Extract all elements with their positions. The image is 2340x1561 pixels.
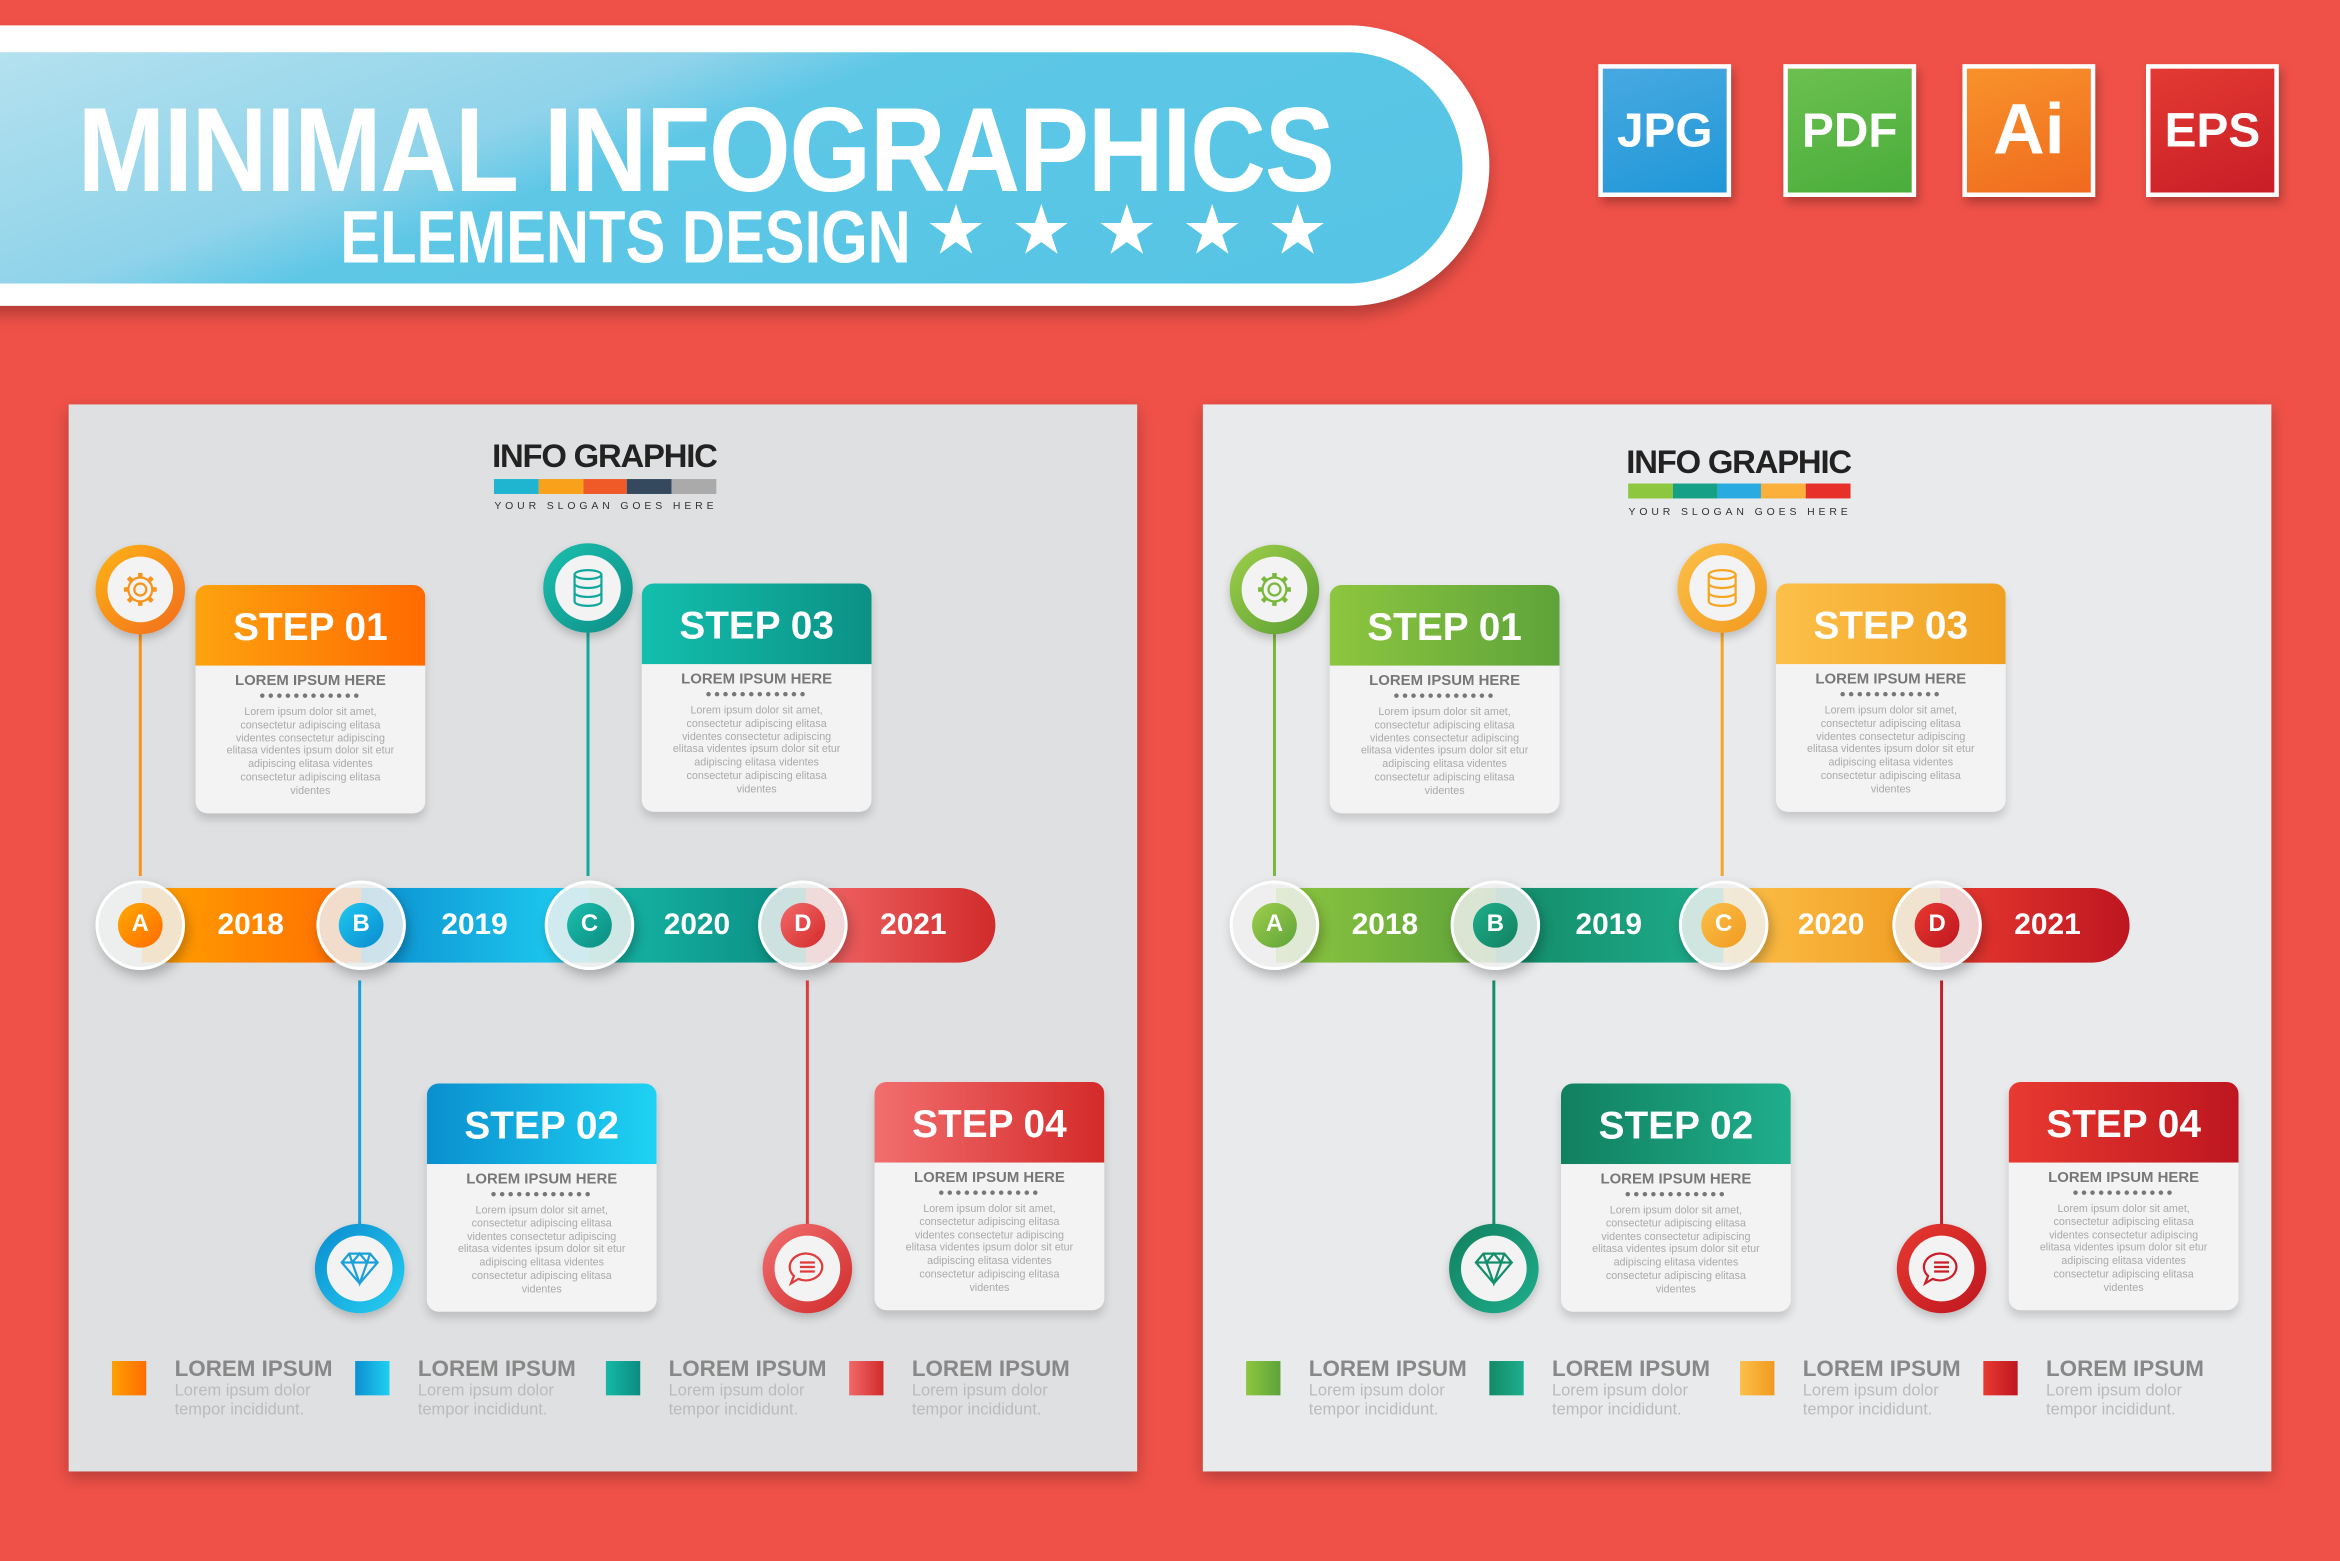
legend xyxy=(1246,1357,2204,1419)
legend: Lorem ipsum dolor xyxy=(175,1382,311,1400)
card: step 03: ●●●●●●●●●●●● xyxy=(1840,689,1942,700)
card: step 03: LOREM IPSUM HERE xyxy=(681,672,832,688)
card: step 02: Lorem ipsum dolor sit amet, consectetur adipiscing elitasa videntes consectetur adipiscing elitasa videntes ipsum dolor sit etur adipiscing elitasa videntes consectetur adipiscing elitasa videntes xyxy=(458,1203,625,1295)
card: step 01: LOREM IPSUM HERE xyxy=(235,673,386,689)
card: step 01: ●●●●●●●●●●●● xyxy=(1393,691,1496,701)
panel title: INFO GRAPHIC xyxy=(492,437,717,475)
card: step 01: LOREM IPSUM HERE xyxy=(1369,673,1520,689)
legend: tempor incididunt. xyxy=(912,1401,1041,1419)
legend: tempor incididunt. xyxy=(669,1401,798,1419)
legend: LOREM IPSUM xyxy=(1309,1357,1467,1382)
legend: LOREM IPSUM xyxy=(175,1357,333,1382)
card: step 02: Lorem ipsum dolor sit amet, consectetur adipiscing elitasa videntes consectetur adipiscing elitasa videntes ipsum dolor sit etur adipiscing elitasa videntes consectetur adipiscing elitasa videntes xyxy=(1592,1203,1760,1295)
card: step 04: LOREM IPSUM HERE xyxy=(914,1170,1065,1186)
badge: JPG: JPG xyxy=(1617,103,1712,157)
card: step 04: ●●●●●●●●●●●● xyxy=(938,1188,1041,1198)
milestone markers: A xyxy=(1266,912,1283,937)
card: step 03: Lorem ipsum dolor sit amet, consectetur adipiscing elitasa videntes consectetur adipiscing elitasa videntes ipsum dolor sit etur adipiscing elitasa videntes consectetur adipiscing elitasa videntes xyxy=(1807,703,1975,795)
panel: timeline version 2 xyxy=(1203,404,2271,1471)
banner inner pill xyxy=(0,52,1463,284)
card: step 02: STEP 02 xyxy=(464,1103,619,1148)
timeline bar xyxy=(93,880,996,982)
card: step 03: LOREM IPSUM HERE xyxy=(1815,672,1966,688)
card: step 01: Lorem ipsum dolor sit amet, consectetur adipiscing elitasa videntes consectetur adipiscing elitasa videntes ipsum dolor sit etur adipiscing elitasa videntes consectetur adipiscing elitasa videntes xyxy=(227,704,394,797)
legend: Lorem ipsum dolor xyxy=(912,1382,1048,1400)
connector line 4 xyxy=(1940,980,1943,1228)
timeline bar: 2020 xyxy=(664,909,730,942)
card: step 03: STEP 03 xyxy=(679,603,834,648)
card: step 04: LOREM IPSUM HERE xyxy=(2048,1170,2199,1186)
timeline bar: 2021 xyxy=(880,909,947,942)
badge: PDF: PDF xyxy=(1802,103,1898,157)
timeline bar: 2020 xyxy=(1798,909,1864,942)
card: step 02 xyxy=(427,1083,657,1312)
legend: tempor incididunt. xyxy=(1309,1401,1438,1419)
legend: LOREM IPSUM xyxy=(912,1357,1070,1382)
legend: LOREM IPSUM xyxy=(2046,1357,2204,1382)
card: step 02: STEP 02 xyxy=(1599,1103,1753,1148)
icon: gear xyxy=(96,545,185,634)
card: step 02: LOREM IPSUM HERE xyxy=(1600,1171,1751,1188)
header banner xyxy=(0,25,1489,306)
card: step 03 xyxy=(1776,584,2006,812)
slogan: YOUR SLOGAN GOES HERE xyxy=(1629,507,1852,518)
legend: LOREM IPSUM xyxy=(1552,1357,1710,1382)
legend: LOREM IPSUM xyxy=(669,1357,827,1382)
badge: Ai: Ai xyxy=(1993,91,2065,170)
legend: LOREM IPSUM xyxy=(418,1357,576,1382)
legend: Lorem ipsum dolor xyxy=(1552,1382,1688,1400)
card: step 01: Lorem ipsum dolor sit amet, consectetur adipiscing elitasa videntes consectetur adipiscing elitasa videntes ipsum dolor sit etur adipiscing elitasa videntes consectetur adipiscing elitasa videntes xyxy=(1361,704,1528,797)
badge: PDF xyxy=(1783,64,1916,197)
card: step 04 xyxy=(875,1082,1104,1310)
icon: database xyxy=(1677,543,1767,633)
icon: diamond xyxy=(1449,1224,1539,1313)
milestone markers: A xyxy=(132,912,149,937)
panel title: INFO GRAPHIC xyxy=(1626,443,1851,481)
connector line 1 xyxy=(139,628,142,876)
card: step 02: ●●●●●●●●●●●● xyxy=(490,1189,593,1200)
card: step 01 xyxy=(1330,585,1560,813)
badge: JPG xyxy=(1598,64,1731,197)
card: step 02: LOREM IPSUM HERE xyxy=(466,1171,617,1188)
card: step 04: Lorem ipsum dolor sit amet, consectetur adipiscing elitasa videntes consectetur adipiscing elitasa videntes ipsum dolor sit etur adipiscing elitasa videntes consectetur adipiscing elitasa videntes xyxy=(2040,1201,2207,1294)
legend: tempor incididunt. xyxy=(418,1401,547,1419)
timeline bar: C xyxy=(581,912,598,937)
card: step 04 xyxy=(2009,1082,2239,1310)
timeline bar: D xyxy=(794,912,812,937)
stars: ★★★★★ xyxy=(925,191,1352,269)
legend: tempor incididunt. xyxy=(2046,1401,2176,1419)
card: step 01 xyxy=(195,585,425,813)
connector line 3 xyxy=(586,628,589,876)
legend: Lorem ipsum dolor xyxy=(1803,1382,1939,1400)
badge: Ai xyxy=(1962,64,2095,197)
legend: tempor incididunt. xyxy=(175,1401,304,1419)
legend: Lorem ipsum dolor xyxy=(669,1382,805,1400)
card: step 01: STEP 01 xyxy=(233,604,388,649)
title: MINIMAL INFOGRAPHICS xyxy=(78,84,1333,216)
icon: chat xyxy=(1897,1224,1986,1313)
card: step 03 xyxy=(642,584,872,812)
timeline bar: B xyxy=(1487,912,1504,937)
timeline bar: D xyxy=(1928,912,1946,937)
timeline bar: 2019 xyxy=(1576,909,1642,942)
connector line 4 xyxy=(806,980,809,1228)
legend xyxy=(112,1357,1070,1419)
card: step 04: STEP 04 xyxy=(912,1101,1067,1146)
card: step 04: Lorem ipsum dolor sit amet, consectetur adipiscing elitasa videntes consectetur adipiscing elitasa videntes ipsum dolor sit etur adipiscing elitasa videntes consectetur adipiscing elitasa videntes xyxy=(906,1201,1073,1294)
badge: EPS: EPS xyxy=(2165,103,2260,157)
subtitle: ELEMENTS DESIGN xyxy=(340,195,911,279)
title color bar xyxy=(1628,484,1850,498)
legend: tempor incididunt. xyxy=(1552,1401,1682,1419)
connector line 2 xyxy=(1492,980,1495,1228)
card: step 03: STEP 03 xyxy=(1814,603,1968,648)
card: step 04: STEP 04 xyxy=(2046,1101,2201,1146)
slogan: YOUR SLOGAN GOES HERE xyxy=(494,501,717,512)
icon: diamond xyxy=(315,1224,404,1313)
timeline bar: 2021 xyxy=(2014,909,2081,942)
milestone markers xyxy=(96,880,185,970)
icon: database xyxy=(543,543,633,633)
legend: Lorem ipsum dolor xyxy=(418,1382,554,1400)
card: step 03: ●●●●●●●●●●●● xyxy=(705,689,808,700)
legend: Lorem ipsum dolor xyxy=(1309,1382,1445,1400)
card: step 04: ●●●●●●●●●●●● xyxy=(2072,1188,2175,1198)
card: step 02 xyxy=(1561,1083,1791,1312)
panel: timeline version 1 xyxy=(69,404,1137,1471)
icon: chat xyxy=(763,1224,852,1313)
card: step 01: STEP 01 xyxy=(1367,604,1522,649)
year labels: 2018 xyxy=(1352,909,1418,942)
timeline bar: B xyxy=(353,912,370,937)
milestone markers xyxy=(1230,880,1319,970)
card: step 02: ●●●●●●●●●●●● xyxy=(1625,1189,1727,1200)
badge: EPS xyxy=(2146,64,2279,197)
legend: tempor incididunt. xyxy=(1803,1401,1932,1419)
title color bar xyxy=(494,479,716,494)
timeline bar: 2019 xyxy=(441,909,508,942)
connector line 2 xyxy=(358,980,361,1228)
timeline bar: C xyxy=(1715,912,1732,937)
connector line 1 xyxy=(1273,628,1276,876)
card: step 01: ●●●●●●●●●●●● xyxy=(259,691,362,701)
legend: Lorem ipsum dolor xyxy=(2046,1382,2182,1400)
icon: gear xyxy=(1230,545,1319,634)
legend: LOREM IPSUM xyxy=(1803,1357,1961,1382)
timeline bar xyxy=(1226,880,2130,982)
year labels: 2018 xyxy=(218,909,284,942)
card: step 03: Lorem ipsum dolor sit amet, consectetur adipiscing elitasa videntes consectetur adipiscing elitasa videntes ipsum dolor sit etur adipiscing elitasa videntes consectetur adipiscing elitasa videntes xyxy=(673,703,840,795)
connector line 3 xyxy=(1721,628,1724,876)
